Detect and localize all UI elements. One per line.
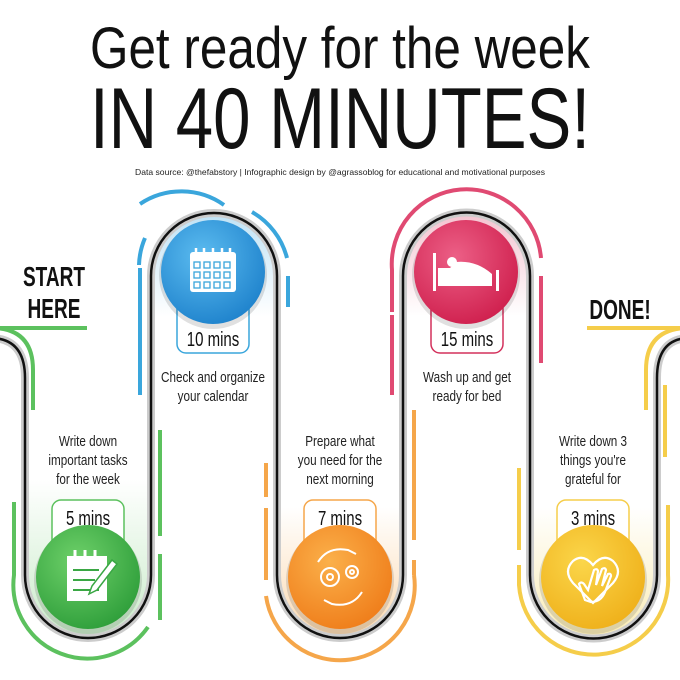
step 4: red: ready for bed bbox=[433, 388, 501, 404]
step 5: yellow bbox=[539, 433, 647, 634]
title: Get ready for the week bbox=[90, 16, 591, 81]
step 3: orange bbox=[286, 433, 394, 634]
step 2: blue: 10 mins bbox=[187, 328, 239, 351]
title bbox=[90, 16, 591, 167]
step 4: red bbox=[412, 220, 520, 404]
step 1: green: for the week bbox=[56, 471, 120, 487]
label: START HERE: HERE bbox=[28, 293, 80, 325]
step 4: red: 15 mins bbox=[441, 328, 493, 351]
step 1: green: important tasks bbox=[48, 452, 128, 468]
label: START HERE bbox=[23, 261, 85, 325]
step 3: orange: Prepare what bbox=[305, 433, 375, 449]
step 1: green bbox=[34, 433, 142, 634]
icon: notepad bbox=[67, 550, 117, 601]
step 3: orange: next morning bbox=[306, 471, 374, 487]
step 5: yellow: Write down 3 bbox=[559, 433, 627, 449]
step 5: yellow: 3 mins bbox=[571, 507, 615, 530]
outer rails bbox=[0, 189, 680, 660]
icon: hands with gears bbox=[318, 549, 362, 605]
step 4: red: Wash up and get bbox=[423, 369, 511, 385]
source line: Data source: @thefabstory | Infographic design by @agrassoblog for educational and motivational purposes bbox=[135, 167, 545, 177]
step 3: orange: you need for the bbox=[298, 452, 382, 468]
serpentine path bbox=[0, 212, 680, 638]
step 3: orange: 7 mins bbox=[318, 507, 362, 530]
icon: heart with hand bbox=[568, 558, 618, 603]
label: DONE: DONE! bbox=[589, 294, 651, 326]
step 5: yellow: things you're bbox=[560, 452, 626, 468]
step 1: green: Write down bbox=[59, 433, 117, 449]
label: START HERE: START bbox=[23, 261, 85, 293]
capsule fills bbox=[25, 212, 657, 638]
step 1: green: 5 mins bbox=[66, 507, 110, 530]
step 2: blue: Check and organize bbox=[161, 369, 265, 385]
icon: bed bbox=[433, 253, 499, 291]
step 5: yellow: grateful for bbox=[565, 471, 621, 487]
step 2: blue bbox=[159, 220, 267, 404]
icon: calendar bbox=[190, 248, 236, 292]
step 2: blue: your calendar bbox=[178, 388, 249, 404]
